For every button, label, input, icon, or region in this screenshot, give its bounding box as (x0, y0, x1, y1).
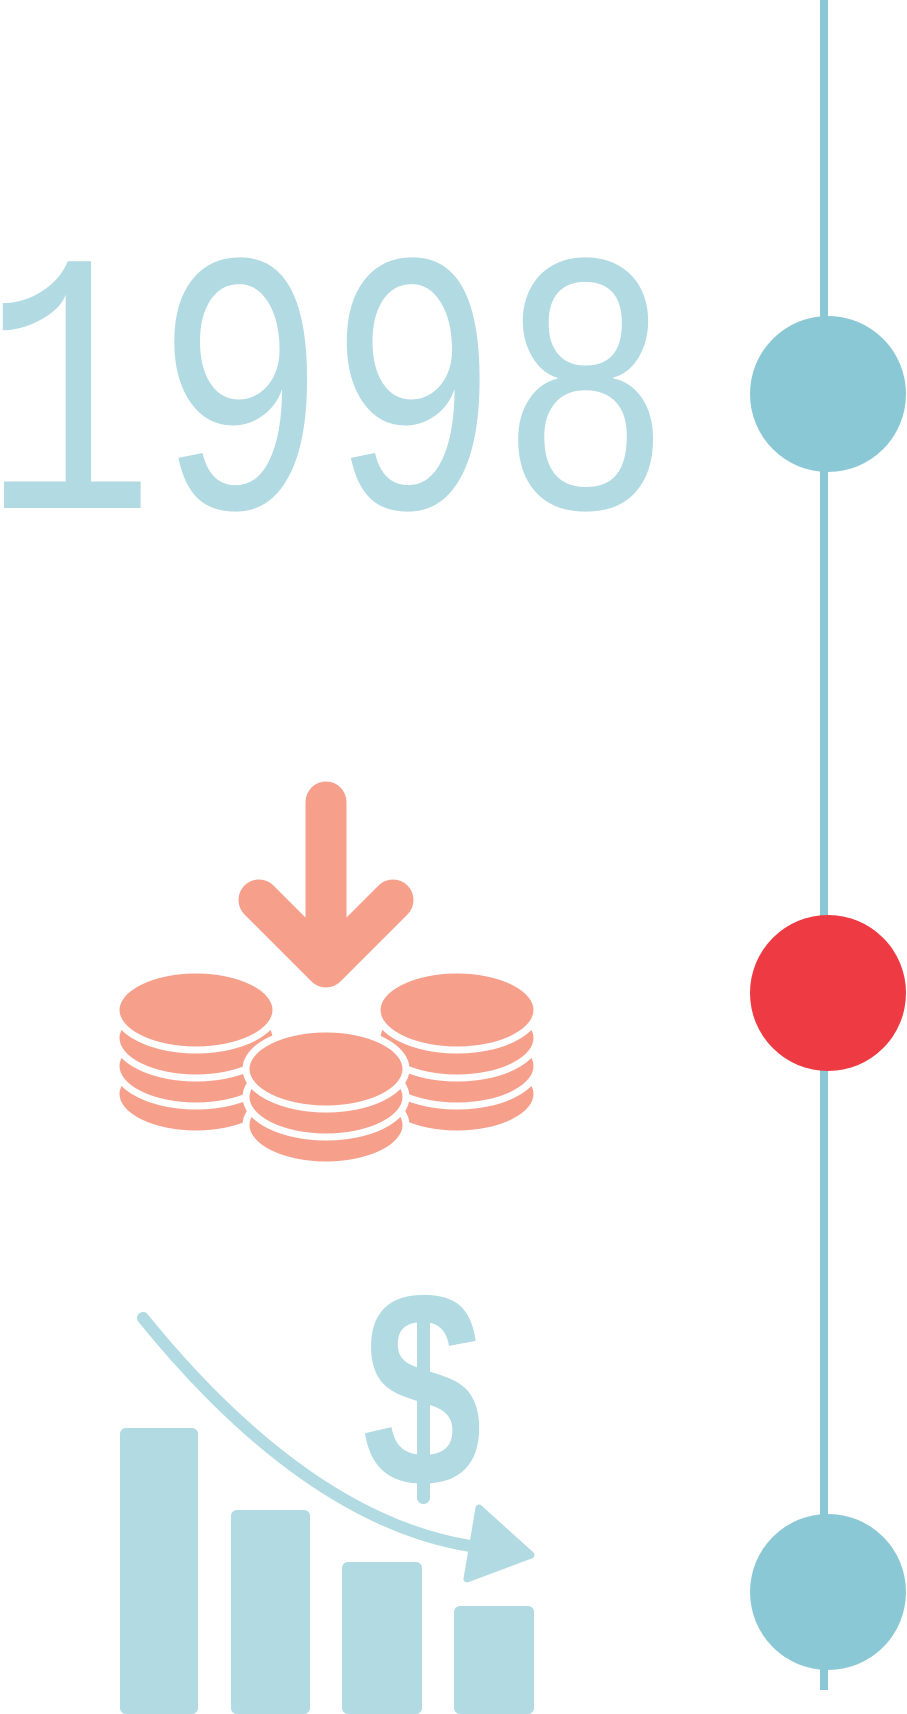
timeline dot 2 (active) (750, 915, 906, 1071)
dollar sign: S (359, 1241, 487, 1539)
timeline: vertical line (820, 0, 828, 1690)
timeline dot 3 (750, 1514, 906, 1670)
bars (120, 1428, 534, 1714)
year title: 1998 (0, 197, 672, 621)
icon: coins with down arrow (116, 802, 537, 1165)
arrow (259, 802, 393, 967)
trend curve with arrow (143, 1318, 531, 1579)
timeline dot 1 (750, 316, 906, 472)
middle coin stack (246, 1029, 406, 1165)
icon: declining cost chart (120, 1241, 534, 1714)
left coin stack (116, 970, 276, 1134)
right coin stack (377, 970, 537, 1134)
